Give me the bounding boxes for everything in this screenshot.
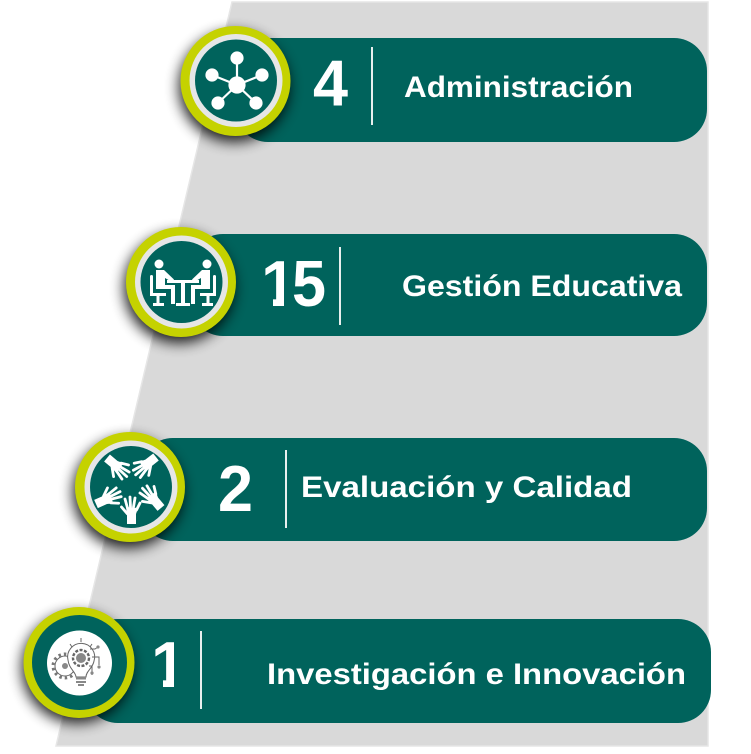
bar: Evaluación y Calidad [140,438,707,541]
row: 15 Gestión Educativa [124,227,707,343]
shadow [73,438,183,548]
badge: hands icon [75,432,185,542]
badge: network icon [180,26,290,136]
shadow [179,32,289,142]
number: 15: 5 [292,247,326,320]
shadow [124,233,234,343]
divider [371,47,373,125]
divider [339,247,341,325]
number: 15 [265,261,324,306]
bar: Investigación e Innovación [85,619,711,723]
number: 15: 1 [261,247,297,320]
number: 2: 2 [218,452,253,525]
bar: Administración [235,38,707,142]
badge: innovation bulb icon [24,607,134,718]
bar: Gestión Educativa [190,234,707,336]
divider [285,450,287,528]
row: 4 Administración [179,26,707,142]
label: Gestión Educativa: Gestión Educativa [402,270,682,303]
label: Investigación e Innovación: Investigación e Innovación [267,658,686,691]
label: Evaluación y Calidad: Evaluación y Calidad [301,471,632,504]
row: 1 Investigación e Innovación [22,607,711,723]
number: 1: 1 [151,628,187,701]
divider [200,631,202,709]
badge: meeting icon [126,227,236,337]
label: Administración: Administración [404,71,633,104]
number: 4: 4 [313,46,348,120]
row: 2 Evaluación y Calidad [73,432,707,548]
shadow [22,613,132,723]
